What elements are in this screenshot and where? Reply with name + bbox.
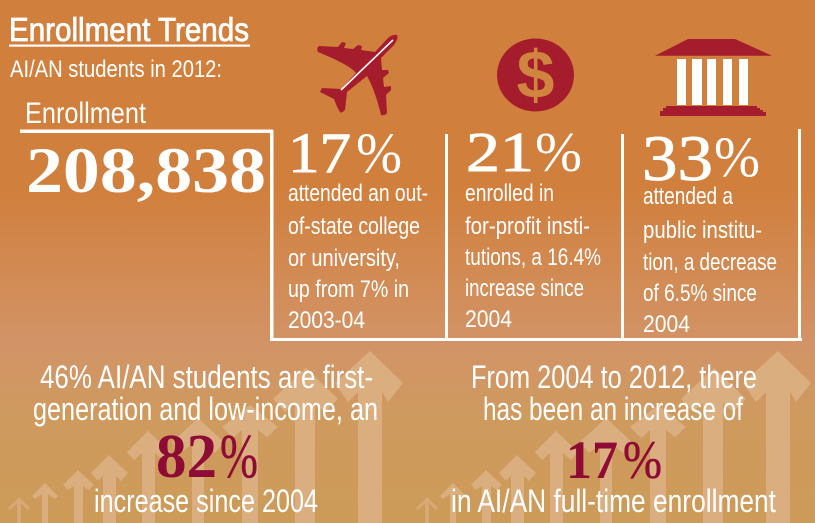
stat: 17% increase: 17	[566, 430, 618, 490]
text: public institution description: 2004	[643, 311, 690, 338]
stat: 82%: 82	[156, 423, 217, 491]
background arrows right	[416, 351, 811, 523]
text: full-time intro	[471, 359, 757, 427]
stat: 21%	[466, 122, 582, 184]
stat: 21%: %	[535, 122, 582, 184]
frame lines	[20, 129, 802, 341]
icon: institution building	[655, 39, 772, 116]
icon: dollar coin: $	[517, 37, 554, 113]
text: out-of-state description: attended an out-	[288, 180, 428, 207]
stat: 17%: %	[356, 122, 402, 185]
text: first-generation outro: increase since 2004	[94, 483, 318, 519]
text: first-generation intro: generation and low-income, an	[33, 391, 378, 427]
text: for-profit description	[465, 180, 601, 333]
text: for-profit description: enrolled in	[465, 180, 554, 207]
text: for-profit description: increase since	[465, 275, 584, 302]
text: full-time intro: has been an increase of	[483, 391, 743, 427]
text: out-of-state description	[288, 180, 428, 334]
callout: full-time enrollment	[451, 359, 776, 519]
text: public institution description: attended a	[643, 183, 734, 210]
stat: 33%	[642, 123, 760, 195]
text: first-generation intro: 46% AI/AN students are first-	[40, 359, 373, 395]
stat: 33%: %	[714, 126, 760, 189]
panel: public institution	[642, 123, 777, 338]
text: out-of-state description: of-state college	[288, 213, 420, 240]
icon: airplane	[317, 35, 398, 115]
stat: 82%	[156, 423, 258, 491]
background arrows left	[8, 351, 403, 523]
stat: 17%	[288, 122, 402, 185]
text: public institution description: of 6.5% since	[643, 280, 757, 307]
text: public institution description	[643, 183, 777, 338]
panel: out-of-state	[288, 122, 428, 334]
text: first-generation intro	[33, 359, 378, 427]
stat: 33%: 33	[642, 123, 713, 195]
text: for-profit description: tutions, a 16.4%	[465, 244, 601, 271]
panel: for-profit	[465, 122, 601, 333]
icon: dollar coin	[497, 37, 574, 113]
panel: enrollment	[25, 97, 266, 207]
stat: total enrollment: 208,838	[26, 135, 266, 207]
stat: 21%: 21	[466, 122, 534, 184]
text: out-of-state description: or university,	[288, 245, 400, 272]
stat: 17% increase	[566, 430, 662, 490]
callout: first-generation	[33, 359, 378, 519]
subtitle: AI/AN students in 2012:	[10, 56, 222, 83]
stat: 17%: 17	[288, 122, 351, 185]
heading: enrollment: Enrollment	[25, 97, 147, 130]
text: out-of-state description: up from 7% in	[288, 276, 409, 303]
text: out-of-state description: 2003-04	[288, 307, 365, 334]
text: for-profit description: 2004	[465, 306, 512, 333]
stat: 17% increase: %	[623, 430, 662, 490]
stat: 82%: %	[220, 423, 258, 491]
title: Enrollment Trends	[9, 11, 249, 48]
text: public institution description: tion, a decrease	[643, 249, 777, 276]
text: for-profit description: for-profit insti-	[465, 213, 590, 240]
text: public institution description: public institu-	[643, 217, 762, 244]
